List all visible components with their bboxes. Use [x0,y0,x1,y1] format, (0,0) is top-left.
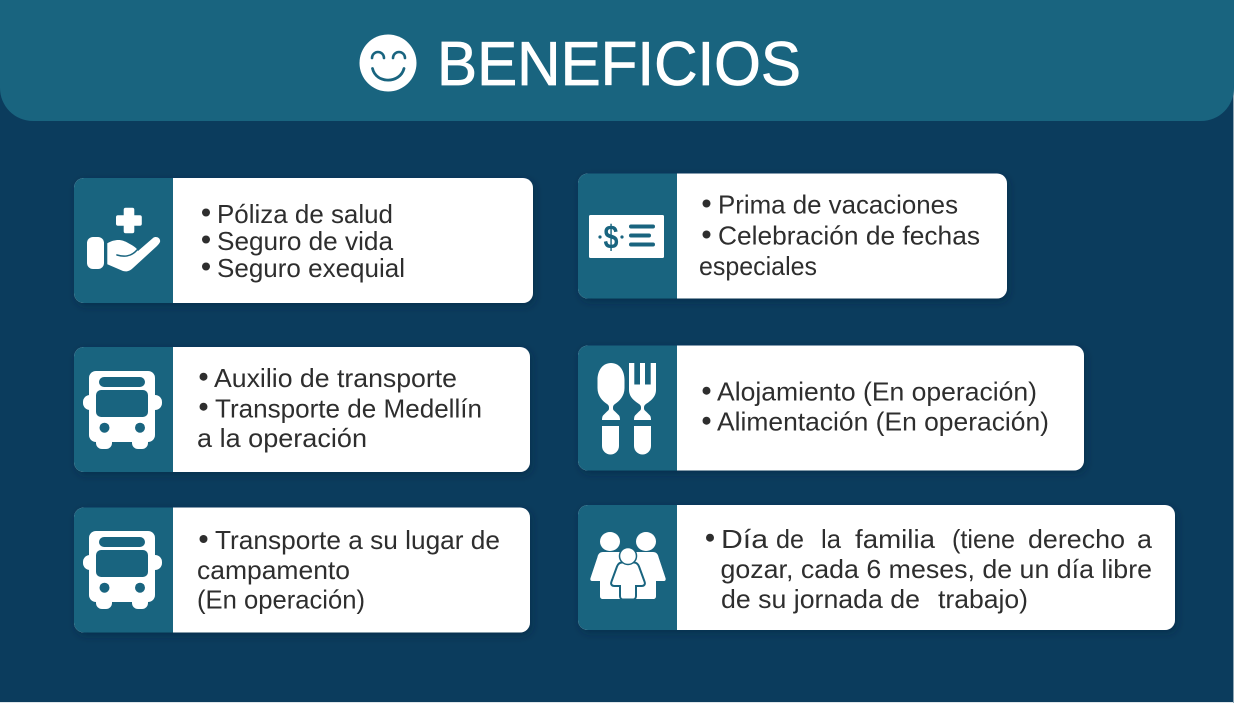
header band [0,0,1234,121]
panel: dia de la familia [578,505,1175,630]
icon: smiley [360,34,416,92]
text: transporte list: Transporte de Medellín [215,394,482,424]
text: familia: familia [855,524,936,554]
icon: bus [83,531,162,609]
icon: family [590,532,666,600]
text: seguros list: Seguro exequial [217,253,405,283]
text: campamento: Transporte a su lugar de [215,525,500,555]
icon: spoon and fork [598,363,656,454]
panel: transporte campamento [74,508,530,632]
text: familia [706,524,1153,614]
text: alojamiento list: Alojamiento (En operación) [717,376,1037,406]
text: seguros list [202,199,405,283]
text: campamento: campamento [197,555,350,585]
text: familia: de su jornada de [721,584,920,614]
text: alojamiento list [702,376,1049,437]
text: familia: trabajo) [938,584,1028,614]
text: familia: Día [721,524,769,554]
text: familia: de [776,524,804,554]
title: BENEFICIOS [437,30,801,99]
panel: seguros [74,178,533,303]
text: primas list: Prima de vacaciones [718,190,958,220]
text: alojamiento list: Alimentación (En operación) [717,407,1049,437]
panel: alojamiento y alimentacion [578,346,1084,470]
text: transporte list: Auxilio de transporte [214,363,457,393]
text: transporte list: a la operación [197,423,367,453]
text: familia: derecho [1028,524,1125,554]
text: primas list: Celebración de fechas [718,220,980,250]
icon: money bill: $ [604,218,618,256]
text: primas list [699,190,980,281]
text: familia: a [1137,524,1153,554]
text: transporte list [197,363,482,453]
text: campamento: (En operación) [197,584,365,614]
text: familia: (tiene [952,524,1015,554]
icon: bus [83,371,162,449]
text: seguros list: Seguro de vida [217,226,394,256]
text: primas list: especiales [699,251,817,281]
text: seguros list: Póliza de salud [217,199,393,229]
icon: money bill [589,215,664,258]
icon: hand with medical cross [87,208,160,271]
panel: primas [578,174,1007,298]
text: campamento [197,525,500,614]
panel: transporte Medellin [74,347,530,472]
text: familia: gozar, cada 6 meses, de un día libre [720,554,1152,584]
text: familia: la [821,524,842,554]
